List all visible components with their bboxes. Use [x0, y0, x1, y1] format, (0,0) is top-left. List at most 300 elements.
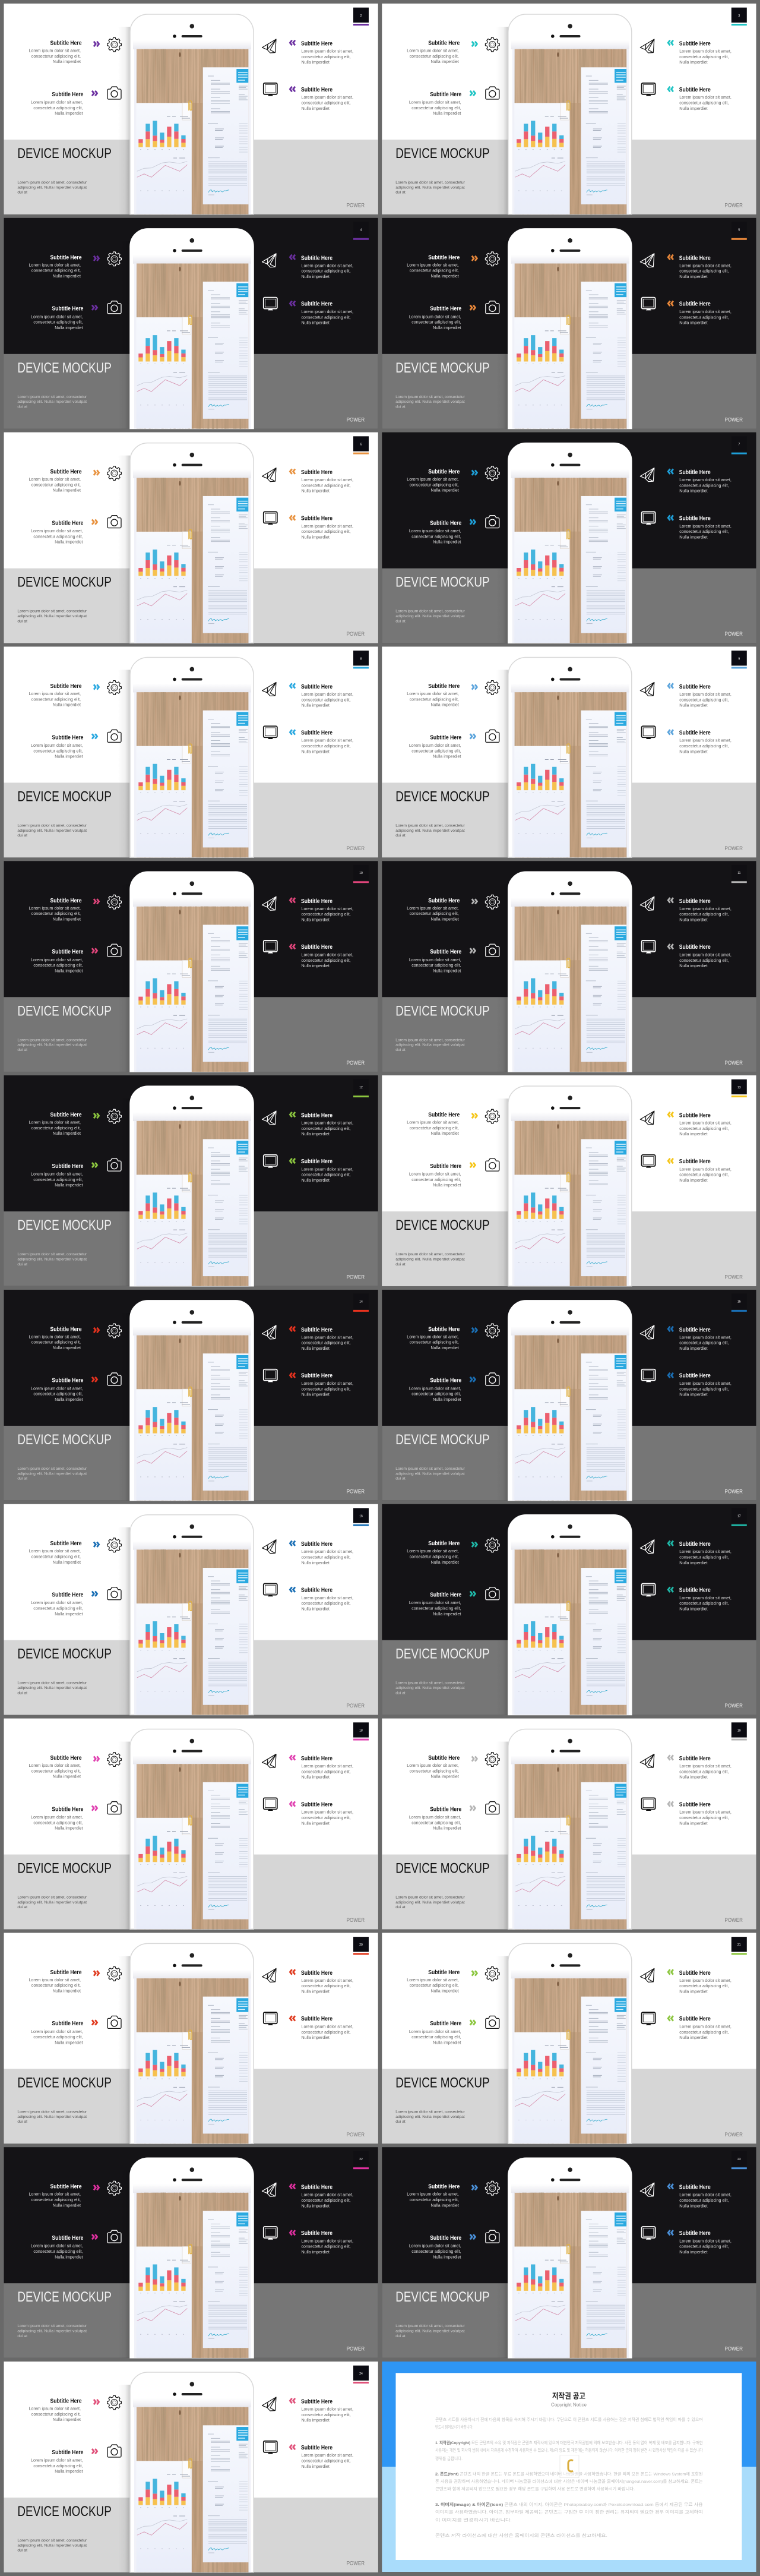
feature: settings: Lorem ipsum dolor sit amet,: [28, 477, 81, 482]
feature: monitor: consectetur adipiscing elit,: [302, 529, 351, 534]
feature: paper plane: Lorem ipsum dolor sit amet,: [679, 1121, 732, 1126]
feature: camera: Lorem ipsum dolor sit amet,: [409, 100, 461, 105]
page number badge: [353, 8, 369, 26]
feature: paper plane: Nulla imperdiet: [302, 489, 330, 494]
title: DEVICE MOCKUP: [395, 1861, 490, 1877]
feature: paper plane: Subtitle Here: [301, 2398, 332, 2405]
feature: settings: Nulla imperdiet: [53, 1560, 81, 1565]
feature: camera: [409, 1587, 499, 1617]
description: adipiscing elit. Nulla imperdiet volutpat: [17, 1257, 87, 1261]
phone mockup: [496, 229, 632, 429]
brand: POWER: [724, 845, 743, 852]
title: DEVICE MOCKUP: [395, 574, 490, 591]
feature: monitor: Lorem ipsum dolor sit amet,: [679, 952, 732, 957]
feature: monitor: consectetur adipiscing elit,: [302, 1387, 351, 1391]
description: adipiscing elit. Nulla imperdiet volutpat: [17, 400, 87, 404]
notice body text: 행위를 금합니다.: [435, 2455, 463, 2461]
feature: monitor: Nulla imperdiet: [679, 1821, 708, 1826]
feature: camera: Nulla imperdiet: [433, 326, 461, 330]
page number badge: [732, 2151, 747, 2169]
feature: paper plane: [640, 682, 732, 708]
feature: paper plane: consectetur adipiscing elit,: [679, 269, 729, 274]
feature: monitor: Lorem ipsum dolor sit amet,: [302, 2025, 353, 2029]
feature: monitor: Subtitle Here: [301, 301, 332, 308]
feature: paper plane: Subtitle Here: [679, 1969, 711, 1977]
feature: camera: Nulla imperdiet: [55, 2469, 83, 2474]
feature: camera: [409, 2230, 499, 2259]
feature: monitor: Nulla imperdiet: [302, 2464, 330, 2469]
feature: monitor: Lorem ipsum dolor sit amet,: [679, 1167, 732, 1172]
feature: settings: [28, 2395, 121, 2422]
feature: camera: [31, 1158, 121, 1188]
feature: paper plane: Lorem ipsum dolor sit amet,: [679, 263, 732, 268]
feature: monitor: Lorem ipsum dolor sit amet,: [679, 2239, 732, 2243]
feature: monitor: Subtitle Here: [301, 943, 332, 951]
feature: settings: [28, 1109, 121, 1136]
feature: camera: Lorem ipsum dolor sit amet,: [31, 2244, 83, 2249]
feature: camera: consectetur adipiscing elit,: [33, 2249, 83, 2254]
feature: paper plane: Lorem ipsum dolor sit amet,: [679, 692, 732, 697]
feature: settings: Nulla imperdiet: [430, 2203, 459, 2208]
feature: monitor: consectetur adipiscing elit,: [302, 958, 351, 963]
feature: paper plane: Lorem ipsum dolor sit amet,: [302, 263, 353, 268]
title: DEVICE MOCKUP: [395, 1432, 490, 1448]
feature: camera: Nulla imperdiet: [433, 755, 461, 759]
feature: camera: Subtitle Here: [430, 519, 461, 526]
notice body text: 1. 저작권(Copyright) 모든 콘텐츠의 소유 및 저작권은 콘텐츠 제작사에 있으며 대한민국 저작권법에 의해 보호받습니다. 사전 동의 없이 복제 및 배포를 금지합니다. 구매한: [435, 2440, 703, 2445]
phone mockup: [496, 14, 632, 214]
feature: settings: Nulla imperdiet: [430, 1560, 459, 1565]
feature: monitor: Lorem ipsum dolor sit amet,: [302, 1596, 353, 1600]
feature: camera: Nulla imperdiet: [433, 111, 461, 116]
feature: settings: Nulla imperdiet: [430, 488, 459, 493]
feature: monitor: consectetur adipiscing elit,: [679, 1816, 729, 1820]
feature: monitor: Nulla imperdiet: [302, 1821, 330, 1826]
notice body text: 3. 이미지(image) & 아이콘(icon) 콘텐츠 내의 이미지, 아이콘은 Photopixabay.com과 Pexelsdownload.com 등에서 제공된 무료 사용: [435, 2502, 703, 2507]
feature: settings: [407, 466, 499, 493]
page number badge: [353, 436, 369, 454]
feature: monitor: consectetur adipiscing elit,: [302, 2244, 351, 2249]
feature: monitor: Subtitle Here: [679, 514, 711, 522]
feature: paper plane: [262, 468, 353, 494]
feature: camera: Lorem ipsum dolor sit amet,: [409, 743, 461, 748]
feature: settings: consectetur adipiscing elit,: [410, 697, 459, 702]
feature: paper plane: consectetur adipiscing elit,: [302, 912, 351, 917]
page number badge: 8: [360, 657, 362, 661]
phone mockup: [118, 1943, 254, 2143]
slide 20: [4, 1933, 378, 2143]
brand: POWER: [347, 631, 365, 637]
feature: paper plane: Lorem ipsum dolor sit amet,: [679, 2193, 732, 2198]
feature: paper plane: Subtitle Here: [679, 1326, 711, 1333]
paperclip badge: [560, 2455, 579, 2478]
feature: camera: consectetur adipiscing elit,: [33, 1177, 83, 1182]
page number badge: 11: [737, 872, 741, 875]
feature: camera: Lorem ipsum dolor sit amet,: [31, 1815, 83, 1820]
brand: POWER: [724, 631, 743, 637]
title: DEVICE MOCKUP: [395, 1217, 490, 1233]
feature: monitor: Subtitle Here: [679, 1801, 711, 1808]
feature: camera: Nulla imperdiet: [55, 1397, 83, 1402]
feature: settings: Subtitle Here: [428, 1540, 460, 1547]
feature: monitor: Subtitle Here: [301, 1801, 332, 1808]
feature: monitor: [642, 2012, 732, 2040]
description: adipiscing elit. Nulla imperdiet volutpat: [17, 1043, 87, 1047]
feature: paper plane: Nulla imperdiet: [302, 1132, 330, 1137]
feature: settings: Nulla imperdiet: [53, 1131, 81, 1136]
feature: paper plane: consectetur adipiscing elit,: [302, 2198, 351, 2203]
slide background: [382, 433, 756, 643]
feature: paper plane: Lorem ipsum dolor sit amet,: [302, 1764, 353, 1769]
feature: settings: [28, 2181, 121, 2208]
feature: camera: consectetur adipiscing elit,: [33, 1820, 83, 1825]
feature: monitor: Nulla imperdiet: [302, 2035, 330, 2040]
page number badge: [353, 1294, 369, 1312]
page number badge: 6: [360, 443, 362, 446]
feature: monitor: Subtitle Here: [301, 729, 332, 736]
slide 10: [4, 861, 378, 1072]
description: dui at: [395, 1691, 406, 1695]
feature: settings: Nulla imperdiet: [53, 2417, 81, 2422]
page number badge: 14: [359, 1300, 363, 1304]
feature: paper plane: Lorem ipsum dolor sit amet,: [302, 1335, 353, 1340]
feature: paper plane: Subtitle Here: [679, 2184, 711, 2191]
feature: camera: consectetur adipiscing elit,: [411, 2249, 461, 2254]
title: DEVICE MOCKUP: [395, 360, 490, 376]
feature: camera: Nulla imperdiet: [433, 968, 461, 973]
feature: camera: Subtitle Here: [430, 1163, 461, 1170]
slide background: [4, 218, 378, 429]
title: DEVICE MOCKUP: [17, 1432, 112, 1448]
feature: settings: [407, 2181, 499, 2208]
feature: paper plane: consectetur adipiscing elit,: [679, 55, 729, 59]
slide 3: [382, 4, 756, 214]
feature: monitor: [264, 1155, 353, 1183]
description: adipiscing elit. Nulla imperdiet volutpat: [395, 829, 465, 833]
notice body text: 콘텐츠 저작 라이선스에 대한 사항은 홈페이지의 콘텐츠 라이선스를 참고하세요.: [435, 2533, 607, 2538]
feature: camera: consectetur adipiscing elit,: [411, 749, 461, 753]
description: dui at: [17, 619, 27, 623]
slide background: [4, 861, 378, 1072]
feature: camera: consectetur adipiscing elit,: [33, 749, 83, 753]
feature: monitor: Lorem ipsum dolor sit amet,: [302, 1810, 353, 1815]
feature: monitor: [264, 1798, 353, 1826]
feature: monitor: Nulla imperdiet: [679, 2035, 708, 2040]
feature: monitor: Lorem ipsum dolor sit amet,: [679, 310, 732, 314]
feature: monitor: Lorem ipsum dolor sit amet,: [302, 95, 353, 100]
feature: monitor: Lorem ipsum dolor sit amet,: [679, 1810, 732, 1815]
description: dui at: [395, 1262, 406, 1267]
slide background: [4, 2147, 378, 2358]
brand: POWER: [724, 416, 743, 423]
feature: settings: [28, 1753, 121, 1779]
feature: settings: Lorem ipsum dolor sit amet,: [28, 49, 81, 53]
feature: paper plane: Lorem ipsum dolor sit amet,: [679, 49, 732, 53]
description: Lorem ipsum dolor sit amet, consectetur: [17, 610, 87, 614]
page number badge: [353, 1937, 369, 1955]
feature: paper plane: Subtitle Here: [301, 1540, 332, 1548]
feature: paper plane: [262, 2397, 353, 2423]
feature: paper plane: Subtitle Here: [679, 469, 711, 476]
feature: paper plane: Nulla imperdiet: [679, 1989, 708, 1994]
feature: paper plane: Nulla imperdiet: [679, 60, 708, 65]
title: DEVICE MOCKUP: [17, 2075, 112, 2091]
feature: paper plane: consectetur adipiscing elit,: [302, 1769, 351, 1774]
feature: monitor: Nulla imperdiet: [679, 106, 708, 111]
feature: paper plane: Lorem ipsum dolor sit amet,: [679, 478, 732, 482]
feature: camera: Lorem ipsum dolor sit amet,: [31, 958, 83, 962]
feature: monitor: consectetur adipiscing elit,: [679, 744, 729, 749]
feature: camera: Nulla imperdiet: [433, 2040, 461, 2045]
feature: paper plane: consectetur adipiscing elit,: [679, 697, 729, 702]
feature: paper plane: Nulla imperdiet: [302, 2204, 330, 2208]
title: DEVICE MOCKUP: [395, 2075, 490, 2091]
description: dui at: [17, 2120, 27, 2124]
slide background: [382, 218, 756, 429]
page number badge: 7: [738, 443, 740, 446]
feature: monitor: [642, 1584, 732, 1612]
description: adipiscing elit. Nulla imperdiet volutpat: [395, 185, 465, 190]
feature: camera: consectetur adipiscing elit,: [411, 1392, 461, 1397]
page number badge: 22: [359, 2158, 363, 2161]
feature: camera: Nulla imperdiet: [55, 1612, 83, 1617]
feature: settings: consectetur adipiscing elit,: [31, 1340, 81, 1345]
page number badge: 2: [360, 14, 362, 18]
feature: paper plane: Subtitle Here: [301, 254, 332, 261]
feature: camera: [31, 2016, 121, 2045]
feature: settings: [28, 895, 121, 921]
slide background: [382, 2147, 756, 2358]
page number badge: [353, 222, 369, 240]
feature: paper plane: [640, 1111, 732, 1137]
description: Lorem ipsum dolor sit amet, consectetur: [395, 1038, 466, 1042]
feature: camera: [409, 301, 499, 330]
feature: settings: consectetur adipiscing elit,: [31, 1555, 81, 1560]
feature: monitor: [642, 1369, 732, 1397]
phone mockup: [118, 1515, 254, 1715]
feature: monitor: [264, 940, 353, 968]
slide 7: [382, 433, 756, 643]
feature: settings: Subtitle Here: [428, 1325, 460, 1333]
title: DEVICE MOCKUP: [17, 360, 112, 376]
phone mockup: [118, 1086, 254, 1286]
feature: settings: Subtitle Here: [50, 1325, 82, 1333]
brand: POWER: [724, 1703, 743, 1709]
feature: settings: Lorem ipsum dolor sit amet,: [407, 1334, 459, 1339]
description: dui at: [395, 405, 406, 409]
feature: paper plane: consectetur adipiscing elit,: [302, 2413, 351, 2417]
description: adipiscing elit. Nulla imperdiet volutpat: [395, 1901, 465, 1905]
feature: paper plane: Subtitle Here: [679, 1112, 711, 1119]
feature: settings: Nulla imperdiet: [430, 1346, 459, 1350]
feature: paper plane: Lorem ipsum dolor sit amet,: [302, 2193, 353, 2198]
feature: camera: [409, 1373, 499, 1402]
slide background: [382, 1290, 756, 1501]
phone mockup: [118, 1729, 254, 1929]
feature: settings: consectetur adipiscing elit,: [31, 54, 81, 59]
feature: paper plane: Subtitle Here: [679, 898, 711, 905]
title: DEVICE MOCKUP: [395, 1646, 490, 1662]
feature: monitor: Lorem ipsum dolor sit amet,: [679, 1381, 732, 1386]
description: Lorem ipsum dolor sit amet, consectetur: [17, 823, 87, 828]
description: Lorem ipsum dolor sit amet, consectetur: [395, 1467, 466, 1471]
phone mockup: [496, 443, 632, 643]
feature: camera: [31, 1802, 121, 1831]
slide background: [382, 1504, 756, 1715]
notice body text: 폰 사용을 권장하며 사용하였습니다. 네이버 나눔글꼴 라이선스에 대한 사항은 네이버 나눔글꼴 홈페이지(hangeul.naver.com)를 참고하세요. 폰트는: [435, 2479, 703, 2484]
feature: monitor: consectetur adipiscing elit,: [302, 1816, 351, 1820]
page number badge: [732, 1722, 747, 1741]
feature: paper plane: [640, 2183, 732, 2208]
feature: monitor: Nulla imperdiet: [302, 321, 330, 326]
feature: settings: consectetur adipiscing elit,: [31, 2198, 81, 2202]
description: dui at: [17, 191, 27, 195]
feature: paper plane: Lorem ipsum dolor sit amet,: [302, 1121, 353, 1126]
feature: camera: [409, 1158, 499, 1188]
feature: paper plane: Nulla imperdiet: [679, 1561, 708, 1565]
feature: settings: [407, 895, 499, 921]
feature: settings: consectetur adipiscing elit,: [410, 1769, 459, 1773]
feature: monitor: consectetur adipiscing elit,: [302, 1601, 351, 1606]
page number badge: 10: [359, 872, 363, 875]
title: DEVICE MOCKUP: [17, 1861, 112, 1877]
feature: monitor: [642, 2227, 732, 2255]
feature: monitor: Subtitle Here: [679, 86, 711, 93]
feature: paper plane: [640, 254, 732, 279]
feature: settings: Subtitle Here: [428, 39, 460, 46]
feature: settings: [407, 681, 499, 708]
feature: camera: Nulla imperdiet: [433, 1183, 461, 1188]
feature: settings: Lorem ipsum dolor sit amet,: [407, 906, 459, 911]
slide 15: [382, 1290, 756, 1501]
feature: paper plane: Nulla imperdiet: [302, 917, 330, 922]
description: adipiscing elit. Nulla imperdiet volutpat: [17, 2329, 87, 2334]
feature: paper plane: Subtitle Here: [301, 1755, 332, 1762]
feature: settings: Nulla imperdiet: [430, 1775, 459, 1779]
description: dui at: [17, 2549, 27, 2553]
feature: paper plane: [262, 682, 353, 708]
feature: monitor: Lorem ipsum dolor sit amet,: [302, 952, 353, 957]
feature: settings: [28, 1538, 121, 1565]
feature: settings: Lorem ipsum dolor sit amet,: [407, 692, 459, 696]
feature: settings: Nulla imperdiet: [53, 917, 81, 921]
description: dui at: [17, 1048, 27, 1052]
description: Lorem ipsum dolor sit amet, consectetur: [17, 2539, 87, 2543]
feature: monitor: Lorem ipsum dolor sit amet,: [302, 2453, 353, 2458]
feature: camera: consectetur adipiscing elit,: [33, 2035, 83, 2040]
feature: camera: Lorem ipsum dolor sit amet,: [31, 1172, 83, 1177]
feature: settings: Lorem ipsum dolor sit amet,: [407, 1763, 459, 1768]
notice body text: 콘텐츠와 함께 제공되지 않으므로 필요한 경우 해당 폰트를 구입하여 사용 폰트로 변경하여 사용하시기 바랍니다.: [435, 2486, 635, 2492]
slide 17: [382, 1504, 756, 1715]
feature: paper plane: Subtitle Here: [301, 2184, 332, 2191]
brand: POWER: [347, 2561, 365, 2567]
feature: paper plane: consectetur adipiscing elit,: [302, 1126, 351, 1131]
feature: settings: Subtitle Here: [428, 254, 460, 261]
feature: camera: Subtitle Here: [430, 2020, 461, 2027]
feature: monitor: consectetur adipiscing elit,: [679, 958, 729, 963]
feature: monitor: Nulla imperdiet: [679, 749, 708, 754]
feature: camera: Subtitle Here: [430, 2234, 461, 2242]
feature: paper plane: Lorem ipsum dolor sit amet,: [302, 49, 353, 53]
feature: settings: [28, 466, 121, 493]
feature: monitor: consectetur adipiscing elit,: [679, 315, 729, 320]
page number badge: [353, 1079, 369, 1097]
page number badge: [732, 1937, 747, 1955]
description: adipiscing elit. Nulla imperdiet volutpat: [17, 1472, 87, 1476]
feature: settings: Lorem ipsum dolor sit amet,: [28, 1978, 81, 1982]
feature: paper plane: consectetur adipiscing elit,: [679, 912, 729, 917]
feature: paper plane: consectetur adipiscing elit,: [679, 483, 729, 488]
feature: camera: consectetur adipiscing elit,: [411, 1820, 461, 1825]
brand: POWER: [724, 1274, 743, 1281]
feature: camera: consectetur adipiscing elit,: [411, 106, 461, 111]
description: Lorem ipsum dolor sit amet, consectetur: [395, 1896, 466, 1900]
feature: settings: Lorem ipsum dolor sit amet,: [407, 1120, 459, 1125]
feature: paper plane: consectetur adipiscing elit,: [302, 1341, 351, 1346]
feature: monitor: Subtitle Here: [679, 2230, 711, 2237]
description: dui at: [395, 2120, 406, 2124]
feature: paper plane: Subtitle Here: [301, 1112, 332, 1119]
feature: settings: consectetur adipiscing elit,: [410, 482, 459, 487]
feature: camera: Subtitle Here: [430, 1805, 461, 1813]
feature: paper plane: consectetur adipiscing elit,: [302, 1984, 351, 1988]
feature: camera: [409, 516, 499, 545]
phone mockup: [496, 872, 632, 1072]
feature: monitor: consectetur adipiscing elit,: [679, 1387, 729, 1391]
feature: paper plane: Subtitle Here: [679, 683, 711, 690]
feature: paper plane: Subtitle Here: [679, 1540, 711, 1548]
feature: camera: consectetur adipiscing elit,: [411, 1177, 461, 1182]
feature: paper plane: Subtitle Here: [679, 40, 711, 48]
feature: camera: Lorem ipsum dolor sit amet,: [31, 100, 83, 105]
feature: camera: consectetur adipiscing elit,: [411, 534, 461, 539]
feature: camera: Nulla imperdiet: [55, 1183, 83, 1188]
page number badge: 4: [360, 229, 362, 232]
feature: camera: Subtitle Here: [52, 1163, 84, 1170]
feature: paper plane: consectetur adipiscing elit,: [302, 269, 351, 274]
phone mockup: [118, 1300, 254, 1501]
feature: settings: [28, 1966, 121, 1993]
description: dui at: [17, 1262, 27, 1267]
feature: settings: Lorem ipsum dolor sit amet,: [28, 2407, 81, 2411]
feature: monitor: Lorem ipsum dolor sit amet,: [302, 738, 353, 743]
notice body text: [435, 2417, 703, 2538]
feature: camera: Lorem ipsum dolor sit amet,: [409, 2244, 461, 2249]
feature: paper plane: Nulla imperdiet: [302, 274, 330, 279]
feature: settings: Subtitle Here: [428, 897, 460, 904]
feature: settings: Lorem ipsum dolor sit amet,: [28, 1334, 81, 1339]
feature: paper plane: [262, 896, 353, 922]
description: Lorem ipsum dolor sit amet, consectetur: [17, 2324, 87, 2328]
feature: paper plane: Nulla imperdiet: [679, 2204, 708, 2208]
feature: monitor: Lorem ipsum dolor sit amet,: [302, 1167, 353, 1172]
page number badge: 18: [359, 1729, 363, 1732]
description: Lorem ipsum dolor sit amet, consectetur: [395, 2324, 466, 2328]
feature: settings: Subtitle Here: [428, 1754, 460, 1761]
feature: paper plane: consectetur adipiscing elit,: [679, 1341, 729, 1346]
feature: paper plane: Nulla imperdiet: [679, 703, 708, 708]
description: dui at: [395, 191, 406, 195]
feature: camera: [409, 944, 499, 973]
feature: paper plane: consectetur adipiscing elit,: [679, 1769, 729, 1774]
feature: camera: Lorem ipsum dolor sit amet,: [409, 1386, 461, 1391]
feature: settings: Subtitle Here: [428, 1969, 460, 1976]
description: dui at: [395, 1477, 406, 1481]
page number badge: [353, 1508, 369, 1526]
page number badge: 15: [737, 1300, 741, 1304]
feature: settings: consectetur adipiscing elit,: [410, 269, 459, 273]
